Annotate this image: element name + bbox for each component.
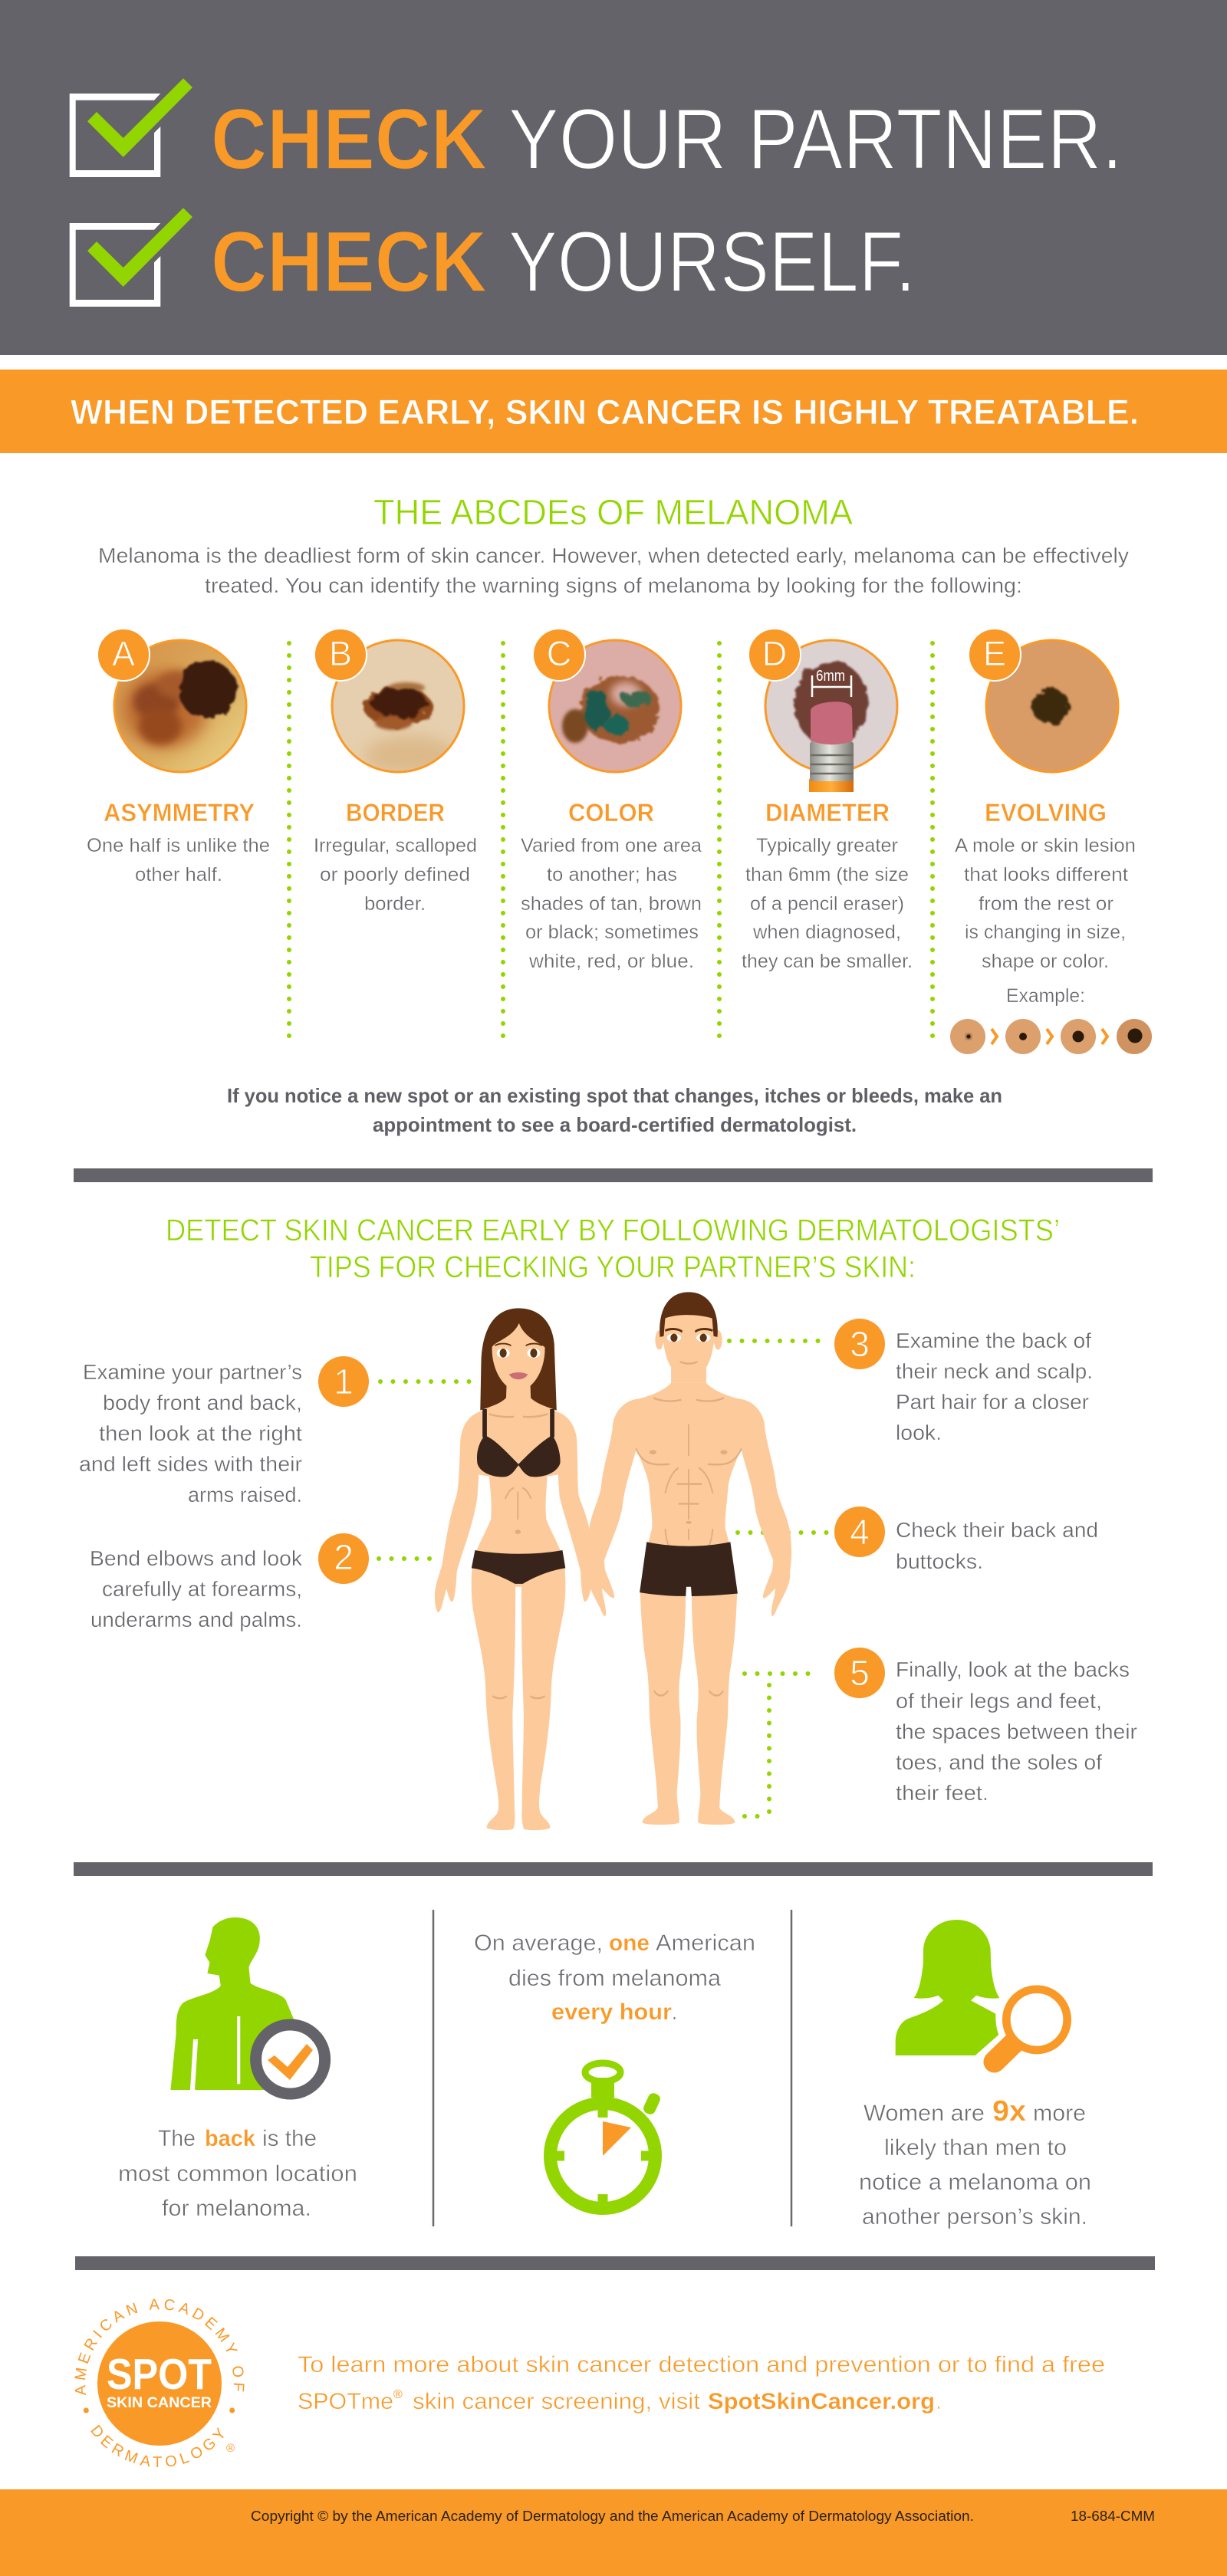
orange banner	[0, 370, 1227, 453]
heading: tips: DETECT SKIN CANCER EARLY BY FOLLOWING DERMATOLOGISTS’	[166, 1214, 1060, 1247]
text color: or black; sometimes	[525, 922, 699, 943]
illustration: woman	[435, 1308, 592, 1830]
text tip 4	[896, 1518, 1098, 1573]
text tip 5: toes, and the soles of	[896, 1750, 1102, 1774]
footer: Copyright © by the American Academy of Dermatology and the American Academy of Dermatology Association.	[251, 2508, 974, 2524]
text evolving: that looks different	[964, 864, 1128, 886]
badge 5	[834, 1648, 885, 1698]
tip 2	[90, 1533, 369, 1631]
text tip 2: underarms and palms.	[90, 1608, 302, 1631]
see a dermatologist note	[227, 1084, 1002, 1136]
text tip 3: Examine the back of	[896, 1329, 1091, 1352]
logo: SPOT skin cancer: AMERICAN ACADEMY OF	[74, 2298, 245, 2395]
text tip 4: Check their back and	[896, 1518, 1098, 1542]
text tip 1: then look at the right	[99, 1421, 302, 1445]
icon: checkbox 1	[70, 78, 192, 177]
heading evolving: EVOLVING	[985, 799, 1107, 826]
text asymmetry: other half.	[135, 864, 222, 886]
badge 4: 4	[850, 1512, 870, 1552]
photo: irregular border mole	[331, 639, 465, 774]
text back: is the	[262, 2126, 317, 2151]
text diameter: they can be smaller.	[742, 951, 913, 972]
heading color: COLOR	[568, 799, 654, 826]
text tip 5: Finally, look at the backs	[896, 1658, 1130, 1681]
heading border: BORDER	[346, 799, 445, 826]
icon: checkbox 2	[70, 208, 192, 307]
heading: ABCDEs of melanoma: THE ABCDEs OF MELANOMA	[373, 492, 853, 532]
heading: tips: TIPS FOR CHECKING YOUR PARTNER’S SKIN:	[310, 1250, 916, 1284]
call to action: skin cancer screening, visit	[413, 2389, 701, 2414]
see a dermatologist note: appointment to see a board-certified dermatologist.	[373, 1113, 857, 1136]
badge D: D	[762, 634, 787, 673]
text diameter: of a pencil eraser)	[750, 893, 904, 915]
text mortality: one	[609, 1930, 650, 1956]
call to action: ®	[393, 2388, 403, 2401]
panel: D diameter	[742, 629, 913, 972]
call to action: To learn more about skin cancer detection and prevention or to find a free	[298, 2352, 1105, 2377]
call to action: SpotSkinCancer.org	[708, 2389, 935, 2414]
badge E: E	[983, 634, 1006, 673]
text back: The	[158, 2126, 196, 2151]
text women: likely than men to	[884, 2135, 1067, 2160]
panel: back stat	[118, 1917, 357, 2221]
text women: another person’s skin.	[862, 2204, 1087, 2229]
illustration: man	[587, 1292, 791, 1825]
text mortality: American	[656, 1930, 755, 1956]
panel: C color	[521, 629, 702, 972]
column dividers	[289, 643, 933, 1048]
heading asymmetry: ASYMMETRY	[104, 799, 255, 826]
icon: man silhouette with check	[170, 1917, 325, 2094]
title line 2	[211, 214, 916, 310]
tip 1	[79, 1356, 369, 1506]
text evolving: A mole or skin lesion	[955, 835, 1136, 856]
badge B: B	[329, 634, 352, 673]
text color: shades of tan, brown	[521, 893, 702, 915]
text tip 1: body front and back,	[103, 1391, 302, 1414]
text tip 2: Bend elbows and look	[90, 1546, 303, 1570]
text tip 3	[896, 1329, 1093, 1444]
header panel	[0, 0, 1227, 355]
icon: stopwatch	[551, 2063, 662, 2208]
logo: SPOT skin cancer	[74, 2298, 245, 2467]
panel: women stat	[859, 1920, 1091, 2229]
badge A: A	[112, 634, 135, 673]
text women	[859, 2095, 1091, 2229]
panel: B border	[314, 629, 477, 915]
heading: tips	[166, 1214, 1060, 1284]
text back: most common location	[118, 2161, 357, 2187]
text tip 1: Examine your partner’s	[83, 1360, 302, 1384]
badge 1: 1	[334, 1362, 354, 1401]
footer	[0, 2489, 1227, 2576]
text color: white, red, or blue.	[528, 951, 694, 972]
badge C	[533, 629, 585, 681]
icon: pencil	[809, 702, 854, 792]
text border: Irregular, scalloped	[314, 835, 477, 856]
text color	[521, 835, 702, 972]
text border	[314, 835, 477, 915]
badge 3	[834, 1319, 885, 1369]
text diameter: when diagnosed,	[752, 922, 901, 943]
text tip 1	[79, 1360, 302, 1506]
text tip 1: arms raised.	[188, 1483, 302, 1506]
logo: SPOT skin cancer: SPOT	[107, 2350, 212, 2399]
tip 5	[834, 1648, 1137, 1805]
tip 3	[834, 1319, 1093, 1444]
tip 4	[834, 1506, 1098, 1573]
badge 4	[834, 1506, 885, 1557]
call to action	[298, 2352, 1105, 2414]
text evolving	[955, 835, 1136, 1007]
title line 1: YOUR PARTNER.	[508, 91, 1123, 187]
title line 2: CHECK	[211, 214, 487, 310]
text tip 5: their feet.	[896, 1781, 989, 1805]
badge 3: 3	[850, 1324, 870, 1364]
text tip 4: buttocks.	[896, 1549, 983, 1573]
connector dots	[379, 1341, 828, 1816]
text evolving: Example:	[1006, 985, 1085, 1007]
title line 2: YOURSELF.	[508, 214, 916, 310]
heading diameter: DIAMETER	[765, 799, 890, 826]
intro paragraph	[98, 544, 1129, 597]
6mm scale	[812, 668, 851, 697]
text tip 5: of their legs and feet,	[896, 1689, 1102, 1713]
badge 2	[318, 1533, 369, 1584]
text border: border.	[364, 893, 426, 915]
logo: SPOT skin cancer: SKIN CANCER	[107, 2395, 212, 2411]
text evolving: from the rest or	[979, 893, 1114, 915]
text tip 3: Part hair for a closer	[896, 1390, 1089, 1414]
badge C: C	[547, 634, 571, 673]
text women: Women are	[864, 2101, 985, 2126]
badge B	[314, 629, 367, 681]
badge 5: 5	[850, 1653, 870, 1693]
photo: evolving mole	[985, 639, 1119, 774]
text mortality	[474, 1930, 755, 2025]
text diameter	[742, 835, 913, 972]
text evolving: is changing in size,	[965, 922, 1126, 943]
text tip 5	[896, 1658, 1137, 1805]
text tip 1: and left sides with their	[79, 1452, 302, 1476]
text asymmetry	[87, 835, 270, 886]
call to action: .	[936, 2389, 941, 2414]
text tip 2	[90, 1546, 303, 1631]
intro paragraph: Melanoma is the deadliest form of skin cancer. However, when detected early, melanoma can be effectively	[98, 544, 1129, 567]
photo: multicoloured mole	[548, 639, 682, 774]
badge 1	[318, 1356, 369, 1407]
text back	[118, 2126, 357, 2221]
6mm scale: 6mm	[816, 668, 845, 685]
text color: Varied from one area	[521, 835, 702, 856]
text diameter: than 6mm (the size	[745, 864, 909, 886]
logo: SPOT skin cancer: DERMATOLOGY	[90, 2424, 224, 2467]
text women: 9x	[992, 2095, 1026, 2128]
title line 1	[211, 91, 1123, 187]
intro paragraph: treated. You can identify the warning signs of melanoma by looking for the following:	[205, 573, 1022, 597]
text diameter: Typically greater	[756, 835, 898, 856]
badge 2: 2	[334, 1537, 354, 1577]
text color: to another; has	[547, 864, 677, 886]
text women: more	[1033, 2101, 1086, 2126]
text mortality: dies from melanoma	[508, 1966, 721, 1991]
panel: A asymmetry	[87, 629, 270, 886]
orange banner: WHEN DETECTED EARLY, SKIN CANCER IS HIGHLY TREATABLE.	[71, 393, 1139, 432]
text back: for melanoma.	[162, 2196, 311, 2221]
text evolving: shape or color.	[982, 951, 1109, 972]
badge D	[748, 629, 801, 681]
text border: or poorly defined	[320, 864, 470, 886]
text tip 3: their neck and scalp.	[896, 1359, 1093, 1383]
text mortality: every hour	[551, 1999, 672, 2025]
text back: back	[205, 2126, 255, 2151]
text women: notice a melanoma on	[859, 2170, 1091, 2195]
photo: mole with pencil eraser	[765, 639, 898, 792]
text tip 5: the spaces between their	[896, 1720, 1137, 1743]
badge A	[97, 629, 150, 681]
example mole progression	[950, 1019, 1152, 1054]
call to action: SPOTme	[298, 2389, 393, 2414]
panel: E evolving	[950, 629, 1152, 1054]
text asymmetry: One half is unlike the	[87, 835, 270, 856]
title line 1: CHECK	[211, 91, 487, 187]
panel: mortality stat	[474, 1930, 755, 2208]
badge E	[969, 629, 1021, 681]
logo: SPOT skin cancer: ®	[226, 2442, 235, 2455]
footer: 18-684-CMM	[1071, 2508, 1155, 2524]
icon: woman silhouette with magnifier	[896, 1920, 1067, 2062]
photo: asymmetric mole	[113, 639, 247, 774]
text mortality: On average,	[474, 1930, 603, 1956]
text tip 3: look.	[896, 1421, 942, 1444]
text tip 2: carefully at forearms,	[102, 1577, 302, 1601]
see a dermatologist note: If you notice a new spot or an existing spot that changes, itches or bleeds, make an	[227, 1084, 1002, 1107]
text mortality: .	[672, 1999, 677, 2025]
